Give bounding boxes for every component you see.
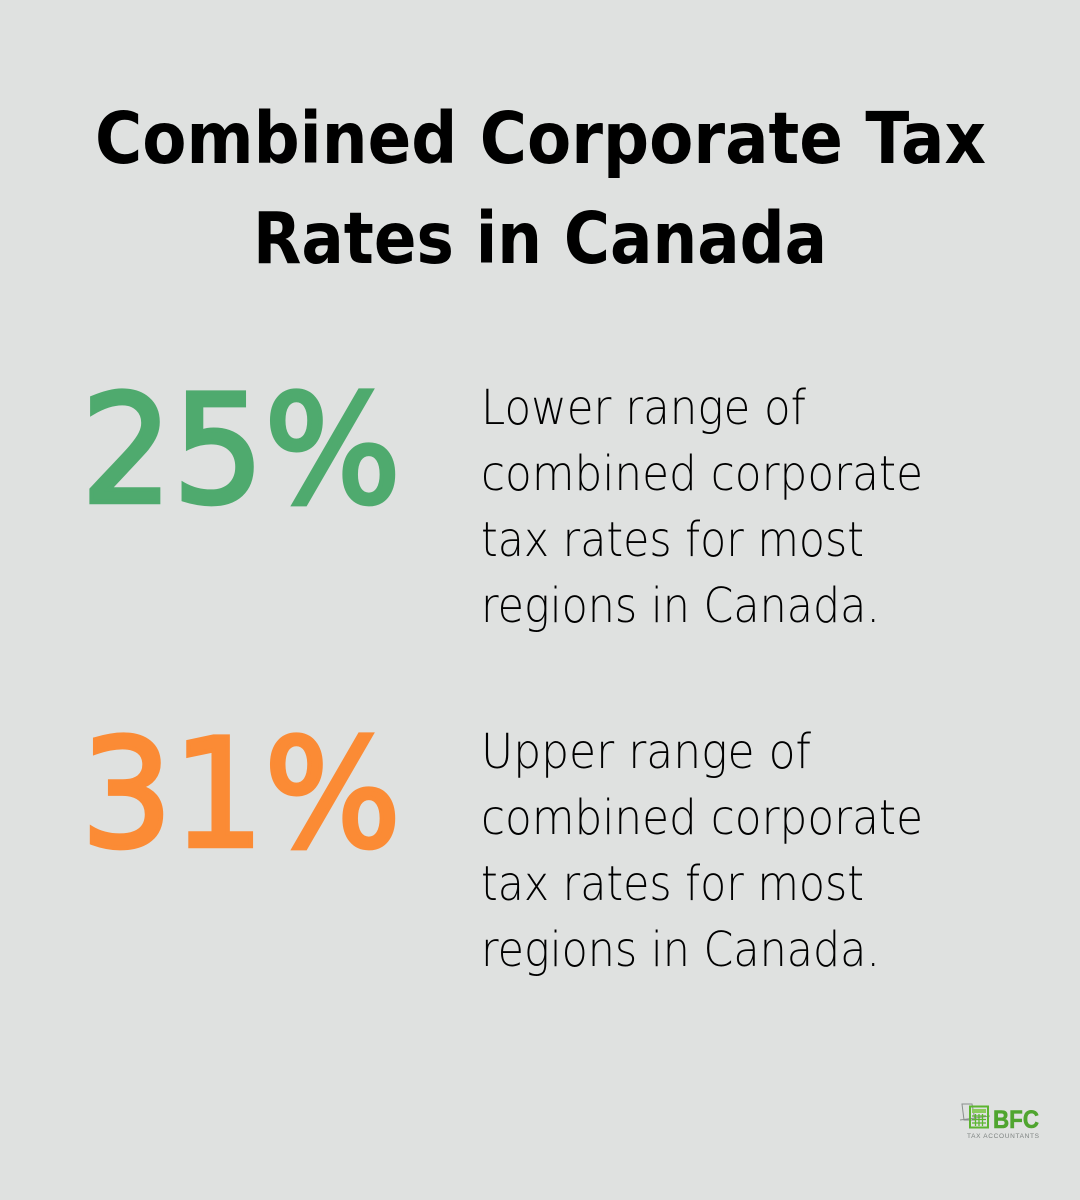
stat: 31%: 31% — [81, 708, 401, 882]
title: Rates in Canada — [253, 197, 827, 280]
text block: upper range description: combined corporate — [481, 790, 923, 846]
text block: lower range description: combined corporate — [481, 446, 923, 502]
title: Combined Corporate Tax — [95, 97, 986, 180]
text block: lower range description: Lower range of — [481, 380, 806, 436]
text block: upper range description — [481, 724, 923, 978]
text block: lower range description — [481, 380, 923, 634]
icon: calculator and papers — [960, 1104, 990, 1128]
logo: BFC Tax Accountants — [960, 1104, 1040, 1140]
stat: 25%: 25% — [81, 364, 401, 538]
logo tagline: TAX ACCOUNTANTS — [967, 1133, 1040, 1140]
title — [95, 97, 986, 280]
text block: lower range description: regions in Canada. — [481, 578, 880, 634]
logo wordmark: BFC — [993, 1106, 1039, 1134]
text block: lower range description: tax rates for most — [481, 512, 864, 568]
text block: upper range description: regions in Canada. — [481, 922, 880, 978]
text block: upper range description: Upper range of — [481, 724, 811, 780]
text block: upper range description: tax rates for most — [481, 856, 864, 912]
